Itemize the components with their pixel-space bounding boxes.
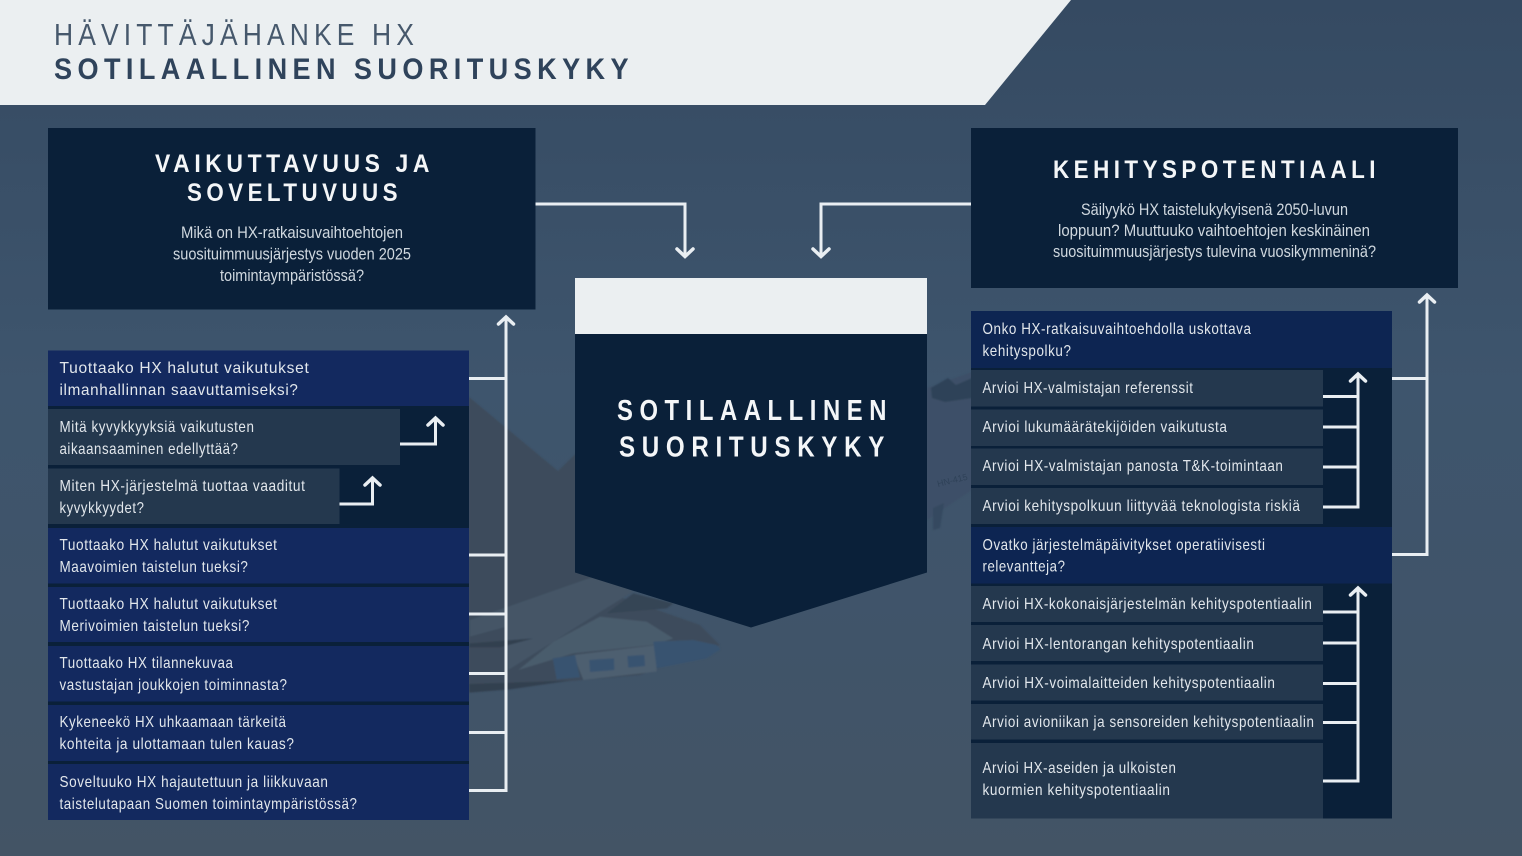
question: tilannekuva: vastustajan joukkojen toiminnasta? xyxy=(60,677,288,694)
question: kehityspolku xyxy=(971,311,1392,368)
question: kyvykkyydet: aikaansaaminen edellyttää? xyxy=(60,441,238,458)
question: järjestelmä: Miten HX-järjestelmä tuottaa vaaditut xyxy=(60,478,306,495)
item: aseet ja kuormat xyxy=(971,743,1323,818)
item: kokonaisjärjestelmä xyxy=(971,586,1323,622)
panel: kehityspotentiaali: KEHITYSPOTENTIAALI xyxy=(1053,156,1380,184)
item: avioniikka ja sensorit xyxy=(971,704,1323,740)
question: järjestelmäpäivitykset xyxy=(971,527,1392,584)
item: referenssit xyxy=(971,370,1323,406)
arrow: lower items bracket xyxy=(1323,588,1366,781)
panel: vaikuttavuus ja soveltuvuus: VAIKUTTAVUUS JA xyxy=(155,150,434,178)
question: ilmanhallinta xyxy=(48,350,469,406)
item: kokonaisjärjestelmä: Arvioi HX-kokonaisjärjestelmän kehityspotentiaalin xyxy=(982,596,1312,613)
question: maavoimat: Tuottaako HX halutut vaikutukset xyxy=(60,537,278,554)
right question column xyxy=(971,311,1392,818)
item: referenssit: Arvioi HX-valmistajan referenssit xyxy=(982,380,1194,397)
centre shield: sotilaallinen suorituskyky: SUORITUSKYKY xyxy=(619,432,891,464)
question: tulen ulottaminen xyxy=(48,705,469,761)
arrow: right panel to centre xyxy=(813,204,971,256)
item: lentorunko xyxy=(971,625,1323,661)
item: lukumäärätekijät xyxy=(971,410,1323,446)
title banner: HÄVITTÄJÄHANKE HX xyxy=(54,17,419,52)
question: järjestelmä: kyvykkyydet? xyxy=(60,500,144,517)
item: lukumäärätekijät: Arvioi lukumäärätekijöiden vaikutusta xyxy=(982,419,1228,436)
panel: kehityspotentiaali xyxy=(971,128,1458,288)
question: hajautettu taistelutapa xyxy=(48,764,469,820)
question: kehityspolku: kehityspolku? xyxy=(982,343,1072,360)
panel: vaikuttavuus ja soveltuvuus: Mikä on HX-ratkaisuvaihtoehtojen xyxy=(181,224,403,242)
arrow: left panel to centre xyxy=(536,204,693,256)
question: tulen ulottaminen: Kykeneekö HX uhkaamaan tärkeitä xyxy=(60,714,286,731)
question: tulen ulottaminen: kohteita ja ulottamaan tulen kauas? xyxy=(60,736,294,753)
item: T&K-toiminta: Arvioi HX-valmistajan panosta T&K-toimintaan xyxy=(982,458,1284,475)
item: aseet ja kuormat: kuormien kehityspotentiaalin xyxy=(982,782,1170,799)
background photo of fighter jet: HN-415 xyxy=(936,472,969,489)
panel: kehityspotentiaali: loppuun? Muuttuuko vaihtoehtojen keskinäinen xyxy=(1058,222,1370,240)
question: ilmanhallinta: ilmanhallinnan saavuttamiseksi? xyxy=(60,382,298,399)
item: lentorunko: Arvioi HX-lentorangan kehityspotentiaalin xyxy=(982,636,1254,653)
arrow: right column bracket to panel xyxy=(1392,295,1434,554)
item: aseet ja kuormat: Arvioi HX-aseiden ja ulkoisten xyxy=(982,760,1176,777)
question: tilannekuva xyxy=(48,646,469,702)
question: järjestelmäpäivitykset: Ovatko järjestelmäpäivitykset operatiivisesti xyxy=(982,537,1266,554)
arrow: left column bracket to panel xyxy=(469,317,514,790)
panel: kehityspotentiaali: suosituimmuusjärjestys tulevina vuosikymmeninä? xyxy=(1053,243,1376,261)
item: voimalaitteet xyxy=(971,664,1323,700)
panel: vaikuttavuus ja soveltuvuus: suosituimmuusjärjestys vuoden 2025 xyxy=(173,246,411,264)
item: teknologinen riski: Arvioi kehityspolkuun liittyvää teknologista riskiä xyxy=(982,498,1300,515)
question: maavoimat xyxy=(48,528,469,584)
question: ilmanhallinta: Tuottaako HX halutut vaikutukset xyxy=(60,360,310,377)
left question column xyxy=(48,350,469,820)
question: merivoimat: Tuottaako HX halutut vaikutukset xyxy=(60,596,278,613)
question: kyvykkyydet xyxy=(48,409,400,465)
title banner: SOTILAALLINEN SUORITUSKYKY xyxy=(54,53,634,86)
question: maavoimat: Maavoimien taistelun tueksi? xyxy=(60,559,248,576)
arrow: kyvykkyydet step up xyxy=(400,418,443,444)
panel: vaikuttavuus ja soveltuvuus: toimintaympäristössä? xyxy=(220,267,364,285)
panel: vaikuttavuus ja soveltuvuus xyxy=(48,128,536,310)
item: voimalaitteet: Arvioi HX-voimalaitteiden kehityspotentiaalin xyxy=(982,675,1276,692)
title banner xyxy=(0,0,1071,105)
question: merivoimat xyxy=(48,587,469,642)
item: T&K-toiminta xyxy=(971,448,1323,485)
question: merivoimat: Merivoimien taistelun tueksi? xyxy=(60,618,250,635)
question: hajautettu taistelutapa: Soveltuuko HX hajautettuun ja liikkuvaan xyxy=(60,774,328,791)
centre shield: sotilaallinen suorituskyky: SOTILAALLINEN xyxy=(617,395,893,427)
arrow: järjestelmä step up xyxy=(340,478,380,504)
question: hajautettu taistelutapa: taistelutapaan Suomen toimintaympäristössä? xyxy=(60,796,358,813)
item: teknologinen riski xyxy=(971,488,1323,524)
arrow: upper items bracket xyxy=(1323,374,1366,507)
question: järjestelmäpäivitykset: relevantteja? xyxy=(982,558,1066,576)
question: kyvykkyydet: Mitä kyvykkyyksiä vaikutusten xyxy=(60,419,254,436)
item: avioniikka ja sensorit: Arvioi avioniikan ja sensoreiden kehityspotentiaalin xyxy=(982,714,1314,731)
panel: vaikuttavuus ja soveltuvuus: SOVELTUVUUS xyxy=(187,179,402,207)
question: kehityspolku: Onko HX-ratkaisuvaihtoehdolla uskottava xyxy=(982,321,1252,338)
question: tilannekuva: Tuottaako HX tilannekuvaa xyxy=(60,655,234,672)
panel: kehityspotentiaali: Säilyykö HX taistelukykyisenä 2050-luvun xyxy=(1081,201,1348,219)
centre shield: sotilaallinen suorituskyky xyxy=(575,278,927,628)
question: järjestelmä xyxy=(48,468,340,524)
